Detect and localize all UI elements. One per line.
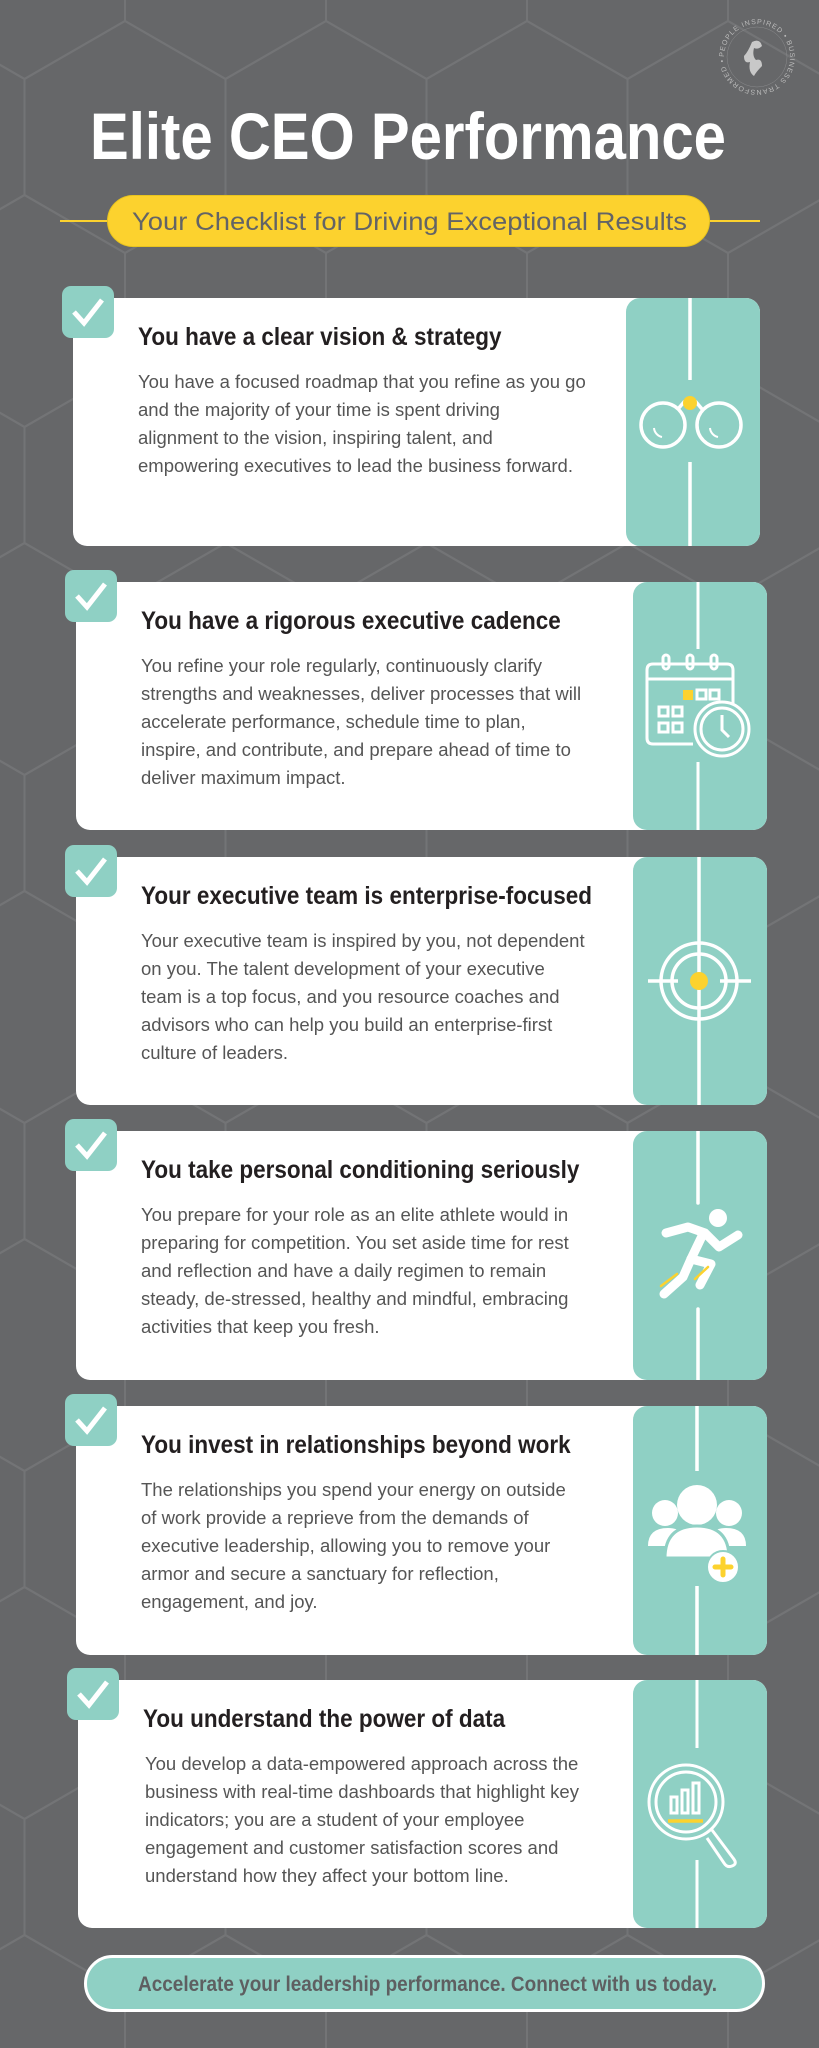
call to action button [84, 1955, 765, 2012]
icon panel: magnifier chart [633, 1680, 767, 1928]
body text: activities that keep you fresh. [141, 1316, 380, 1337]
body text: on you. The talent development of your executive [141, 958, 545, 979]
heading: You take personal conditioning seriously [141, 1156, 579, 1184]
body text [141, 655, 581, 788]
body text: You prepare for your role as an elite athlete would in [141, 1204, 568, 1225]
card 3: executive team [76, 857, 767, 1105]
body text [141, 1204, 569, 1337]
body text: engagement, and joy. [141, 1591, 318, 1612]
card 6: data [78, 1680, 767, 1928]
body text: The relationships you spend your energy on outside [141, 1479, 566, 1500]
body text: accelerate performance, schedule time to plan, [141, 711, 526, 732]
body text: team is a top focus, and you resource coaches and [141, 986, 560, 1007]
card 2: cadence [76, 582, 767, 830]
body text: executive leadership, allowing you to remove your [141, 1535, 550, 1556]
body text: deliver maximum impact. [141, 767, 346, 788]
body text: of work provide a reprieve from the demands of [141, 1507, 529, 1528]
body text: indicators; you are a student of your employee [145, 1809, 524, 1830]
logo badge: PEOPLE INSPIRED • BUSINESS TRANSFORMED • [719, 19, 795, 95]
call to action button: Accelerate your leadership performance. Connect with us today. [138, 1973, 717, 1996]
checkbox [62, 286, 114, 338]
body text: and reflection and have a daily regimen to remain [141, 1260, 546, 1281]
icon panel: target [633, 857, 767, 1105]
body text: steady, de-stressed, healthy and mindful, embracing [141, 1288, 568, 1309]
body text: preparing for competition. You set aside time for rest [141, 1232, 569, 1253]
body text: You develop a data-empowered approach across the [145, 1753, 578, 1774]
body text [138, 371, 586, 476]
body text: armor and secure a sanctuary for reflection, [141, 1563, 499, 1584]
body text: and the majority of your time is spent driving [138, 399, 500, 420]
body text: understand how they affect your bottom line. [145, 1865, 509, 1886]
card 4: conditioning [76, 1131, 767, 1380]
body text: You refine your role regularly, continuously clarify [141, 655, 542, 676]
body text: advisors who can help you build an enterprise-first [141, 1014, 552, 1035]
body text: strengths and weaknesses, deliver processes that will [141, 683, 581, 704]
checkbox [65, 845, 117, 897]
heading: You have a rigorous executive cadence [141, 607, 561, 635]
checkbox [67, 1668, 119, 1720]
heading: Your executive team is enterprise-focused [141, 882, 592, 910]
body text: inspire, and contribute, and prepare ahead of time to [141, 739, 571, 760]
body text: engagement and customer satisfaction scores and [145, 1837, 558, 1858]
card 1: vision [73, 298, 760, 546]
icon panel: calendar clock [633, 582, 767, 830]
checkbox [65, 1119, 117, 1171]
body text [145, 1753, 579, 1886]
heading: You invest in relationships beyond work [141, 1431, 571, 1459]
subtitle pill: Your Checklist for Driving Exceptional Results [132, 208, 687, 236]
body text [141, 930, 585, 1063]
body text [141, 1479, 566, 1612]
heading: You have a clear vision & strategy [138, 323, 501, 351]
card 5: relationships [76, 1406, 767, 1655]
body text: alignment to the vision, inspiring talent, and [138, 427, 493, 448]
subtitle pill [60, 195, 760, 247]
heading: You understand the power of data [143, 1705, 505, 1733]
body text: Your executive team is inspired by you, not dependent [141, 930, 585, 951]
icon panel: binoculars [626, 298, 760, 546]
checkbox [65, 1394, 117, 1446]
checkbox [65, 570, 117, 622]
body text: business with real-time dashboards that highlight key [145, 1781, 579, 1802]
body text: You have a focused roadmap that you refine as you go [138, 371, 586, 392]
icon panel: runner [633, 1131, 767, 1380]
body text: empowering executives to lead the business forward. [138, 455, 573, 476]
icon panel: people plus [633, 1406, 767, 1655]
body text: culture of leaders. [141, 1042, 288, 1063]
